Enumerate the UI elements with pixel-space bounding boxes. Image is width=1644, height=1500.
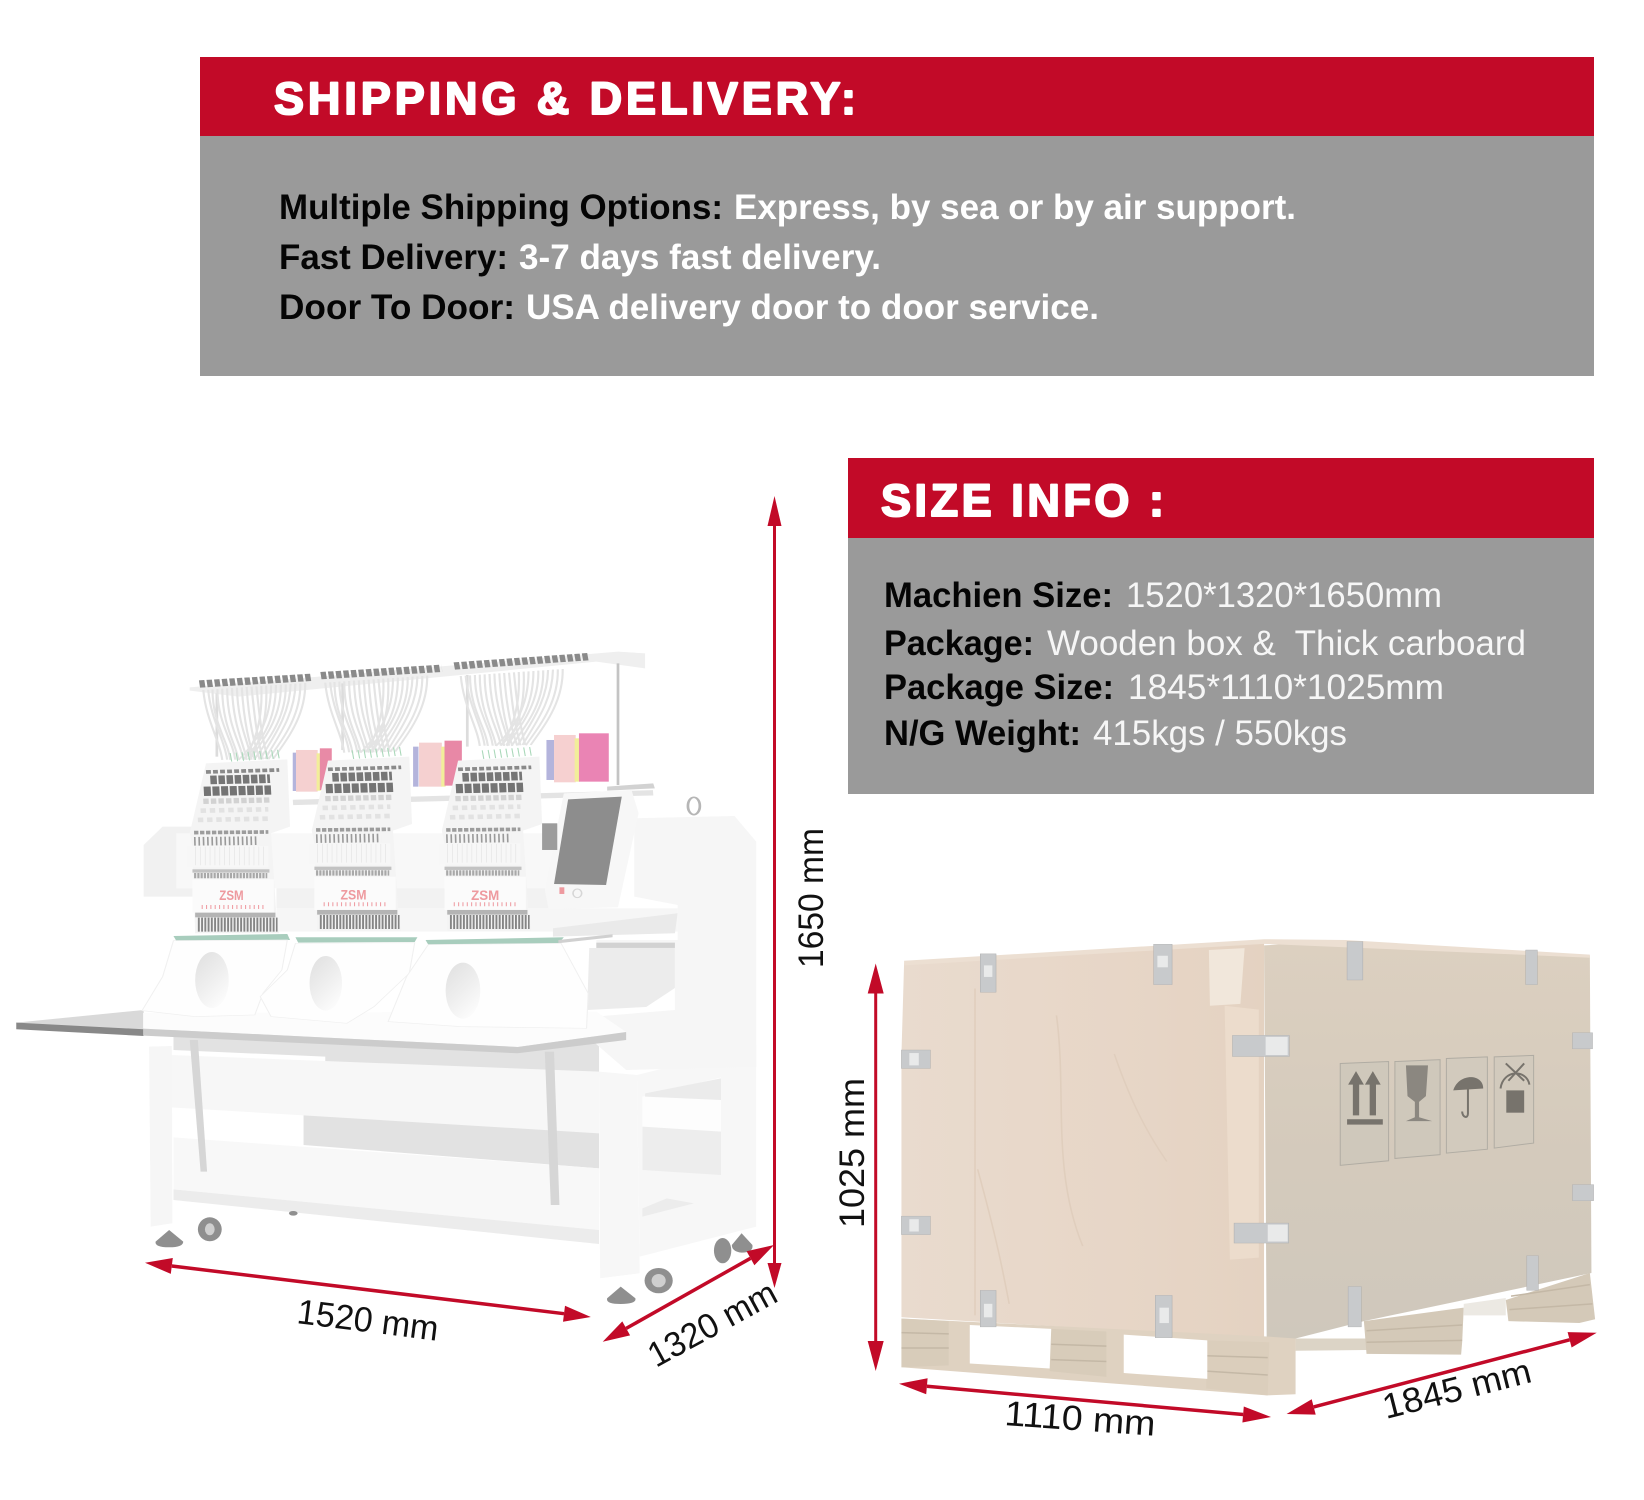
pallet front	[901, 1285, 1592, 1395]
arrow: crate length	[1287, 1332, 1597, 1415]
machine lower frame	[149, 1030, 756, 1304]
label: keep dry	[1446, 1057, 1487, 1153]
machine beam and housing	[144, 797, 756, 1070]
label: 1110 mm: 1110 mm	[1003, 1394, 1157, 1444]
head 2	[309, 751, 412, 931]
text line: fast delivery	[279, 238, 881, 277]
thread spools	[293, 733, 655, 805]
heading: size info: SIZE INFO :	[881, 475, 1164, 526]
label: 1025 mm: 1025 mm	[833, 1078, 872, 1228]
text line: machine size: 1520*1320*1650mm	[1126, 576, 1442, 615]
text line: door to door	[279, 288, 1099, 327]
touch screen	[542, 790, 639, 909]
work table	[16, 1010, 626, 1053]
illustration: embroidery machine	[16, 652, 756, 1304]
arrow: machine depth	[603, 1245, 774, 1342]
heading: shipping and delivery: SHIPPING & DELIVERY:	[274, 73, 856, 124]
embroidery hoops	[173, 934, 613, 945]
text line: package size	[884, 668, 1444, 707]
arrow: crate width	[899, 1378, 1271, 1422]
text line: shipping options	[279, 188, 1296, 227]
shipping header band	[200, 57, 1594, 136]
embroidery heads	[187, 751, 542, 933]
front legs	[149, 1046, 640, 1278]
ZSM logos	[219, 888, 499, 904]
casters and feet	[156, 1211, 753, 1304]
label: 1650 mm: 1650 mm	[792, 828, 831, 968]
panel: size info	[848, 458, 1594, 794]
label: 1845 mm: 1845 mm	[1378, 1352, 1535, 1427]
arrow: machine height	[768, 496, 782, 1288]
text line: shipping options: Express, by sea or by air support.	[734, 188, 1296, 227]
text line: weight	[884, 714, 1347, 753]
size header band	[848, 458, 1594, 538]
thread lines	[203, 669, 563, 760]
table struts	[190, 1040, 559, 1205]
size panel body	[848, 538, 1594, 794]
text line: machine size	[884, 576, 1442, 615]
machine upper assembly	[16, 652, 756, 1070]
ZSM logos: ZSM	[340, 888, 366, 903]
label: 1520 mm: 1520 mm	[295, 1292, 441, 1349]
head 3	[439, 751, 542, 931]
garments on hoops	[142, 940, 588, 1028]
illustration: wooden crate	[901, 939, 1595, 1395]
handling symbols	[1340, 1055, 1534, 1165]
text line: weight: N/G Weight:	[884, 714, 1081, 753]
ZSM logos: ZSM	[219, 889, 244, 904]
panel: shipping and delivery	[200, 57, 1594, 376]
text line: fast delivery: 3-7 days fast delivery.	[519, 238, 881, 277]
shipping panel body	[200, 136, 1594, 376]
arrow: machine width	[145, 1258, 591, 1322]
label: this way up	[1340, 1062, 1389, 1165]
text line: weight: 415kgs / 550kgs	[1093, 714, 1347, 753]
thread rack	[190, 652, 645, 785]
lower shelf and rear panel	[304, 1115, 599, 1168]
label: 1320 mm: 1320 mm	[641, 1273, 784, 1375]
text line: package: Wooden box & Thick carboard	[1047, 624, 1526, 663]
shadow under table	[173, 1030, 599, 1132]
crate side face	[1264, 940, 1591, 1338]
text line: door to door: USA delivery door to door service.	[526, 288, 1099, 327]
text line: package size: Package Size:	[884, 668, 1114, 707]
text line: package: Package:	[884, 624, 1034, 663]
label: fragile	[1395, 1060, 1440, 1158]
metal clips	[901, 942, 1594, 1338]
ZSM logos: ZSM	[471, 889, 499, 904]
front panels	[171, 1055, 599, 1244]
crate front face	[901, 940, 1264, 1338]
text line: machine size: Machien Size:	[884, 576, 1113, 615]
pallet opening left	[970, 1325, 1051, 1368]
text line: package size: 1845*1110*1025mm	[1128, 668, 1444, 707]
pallet opening right	[1124, 1335, 1207, 1379]
text line: door to door: Door To Door:	[279, 288, 515, 327]
head 1	[187, 754, 290, 933]
rear pallet blocks	[1296, 1273, 1595, 1355]
label: keep from heat	[1494, 1055, 1534, 1148]
text line: fast delivery: Fast Delivery:	[279, 238, 508, 277]
side frame	[637, 1045, 756, 1257]
clip highlights	[909, 956, 1288, 1323]
wood grain and trim	[904, 939, 1590, 1315]
text line: shipping options: Multiple Shipping Options:	[279, 188, 723, 227]
arrow: crate height	[868, 964, 884, 1371]
